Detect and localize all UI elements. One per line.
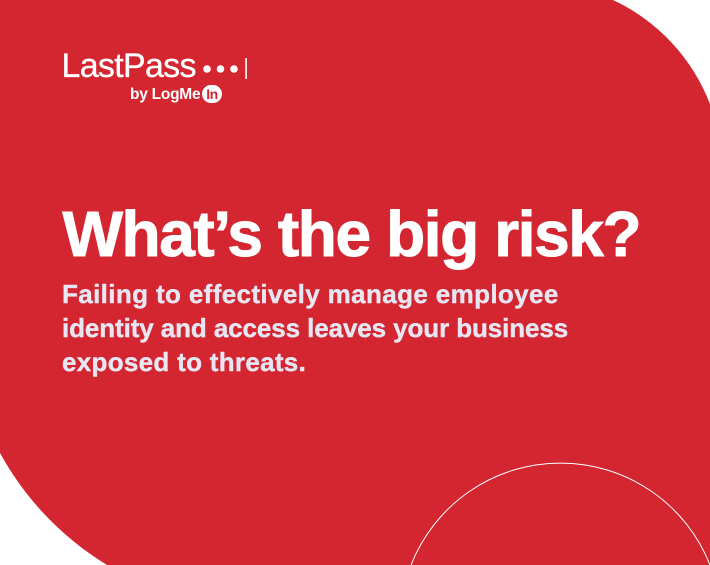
- logo In badge: [202, 85, 222, 103]
- title: What’s the big risk?: [62, 198, 640, 270]
- subtitle: Failing to effectively manage employee: [62, 279, 559, 309]
- logo dots and bar: [203, 58, 247, 79]
- subtitle: [62, 279, 568, 377]
- subtitle: identity and access leaves your business: [62, 313, 568, 343]
- logo: LastPass by LogMeIn: [62, 47, 247, 103]
- logo wordmark: LastPass: [62, 47, 196, 85]
- logo byline: by LogMe: [130, 86, 200, 103]
- logo In badge: In: [206, 86, 218, 102]
- subtitle: exposed to threats.: [62, 347, 306, 377]
